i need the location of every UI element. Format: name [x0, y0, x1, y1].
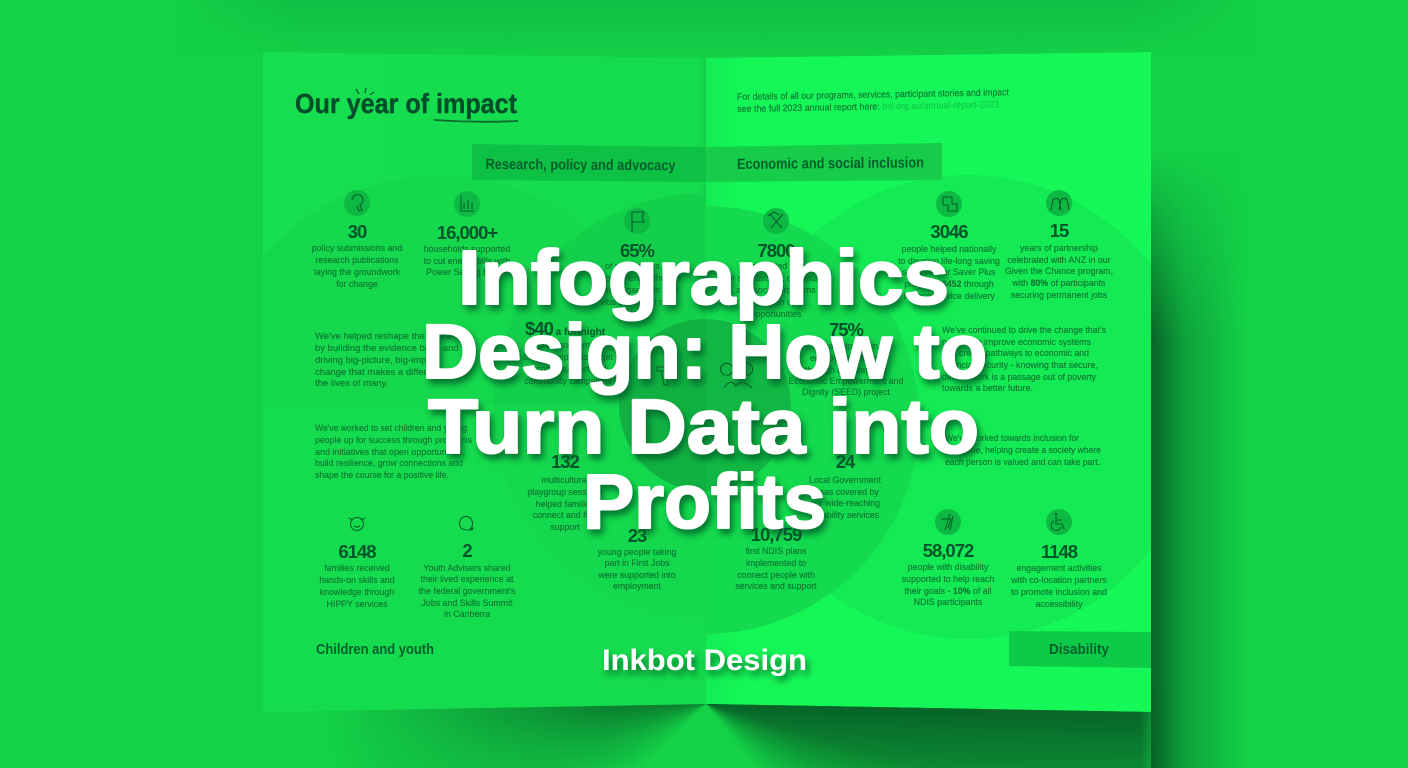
stat: 1148: accessibility: [1036, 599, 1083, 609]
text block: children: people up for success through programs: [315, 435, 472, 446]
stat: 15 years: securing permanent jobs: [1011, 290, 1108, 300]
text block: reshape: change that makes a difference in: [315, 367, 457, 378]
stat: $40 a fortnight: [523, 318, 614, 386]
stat: 6148: knowledge through: [320, 587, 394, 597]
stat: 7800: opportunities: [751, 309, 802, 319]
stat: 10,759: implemented to: [746, 558, 806, 568]
stat: 23: employment: [613, 581, 662, 591]
heading: our year of impact: Our year of impact: [295, 88, 517, 119]
stat: 1148: with co-location partners: [1010, 575, 1107, 585]
panel: right page: [706, 52, 1151, 712]
stat: $40 a fortnight: child and family: [538, 340, 599, 350]
stat: 24: areas covered by: [811, 487, 879, 497]
stat: $40 a fortnight: benefit helped to target: [523, 352, 614, 362]
stat: 30 submissions: policy submissions and: [312, 243, 402, 253]
stat: 15 years: Given the Chance program,: [1005, 266, 1113, 276]
stat: 30 submissions: [312, 190, 402, 289]
stat: 65%: employment pathways: [593, 273, 681, 283]
band: disability: [1009, 631, 1151, 668]
text block: inclusion: We've worked towards inclusion for: [945, 433, 1079, 444]
stat: 23: young people taking: [598, 547, 676, 557]
stat: 15 years: years of partnership: [1020, 243, 1098, 253]
text block: children: [315, 423, 472, 481]
stat: 24: our wide-reaching: [810, 498, 880, 508]
stat: 3046: skills via our Saver Plus: [903, 267, 996, 277]
stat: $40 a fortnight: community campaigns: [524, 376, 612, 386]
stat: 65%: [593, 208, 681, 318]
stat: $40 a fortnight: $40 a fortnight: [525, 318, 606, 339]
text block: economic systems: We've continued to drive the change that's: [942, 325, 1106, 336]
stat: 2 youth advisers: Jobs and Skills Summit: [422, 598, 513, 608]
stat: 15 years: [1005, 190, 1113, 300]
stat: 7800: connected with: [747, 261, 805, 271]
text block: inclusion: each person is valued and can take part.: [945, 457, 1100, 468]
stat: 132: multicultural: [542, 475, 589, 485]
stat: 2 youth advisers: their lived experience at: [421, 574, 514, 584]
band: research, policy and advocacy: [472, 144, 706, 182]
text block: reshape: the lives of many.: [315, 378, 388, 389]
title: Profits: [583, 459, 826, 545]
stat: 132: support: [550, 522, 580, 532]
text block: economic systems: and create pathways to economic and: [942, 348, 1089, 359]
stat: 132: helped families: [536, 499, 595, 509]
heading: disability: Disability: [1049, 641, 1110, 658]
brand: Inkbot Design: Inkbot Design: [602, 644, 807, 677]
stat: 3046: 3046: [930, 221, 968, 242]
stat: 16,000+ households: [424, 191, 510, 277]
stat: 24: disability services: [811, 510, 880, 520]
text block: economic systems: [942, 325, 1106, 394]
stat: 24: Local Government: [809, 475, 881, 485]
stat: 1148: to promote inclusion and: [1011, 587, 1107, 597]
stat: 3046: finance service delivery: [903, 291, 995, 301]
heading: economic and social inclusion: Economic and social inclusion: [737, 154, 924, 173]
stat: 2 youth advisers: [419, 516, 516, 619]
text block: report link: For details of all our programs, services, participant stories and impact: [737, 87, 1009, 103]
stat: 58,072: NDIS participants: [914, 597, 983, 607]
text block: children: We've worked to set children and young: [315, 423, 467, 434]
stat: 2 youth advisers: Youth Advisers shared: [423, 563, 511, 573]
stat: 132: playgroup sessions: [527, 487, 603, 497]
stat: 15 years: with 80% of participants: [1012, 278, 1106, 288]
title: Turn Data into: [428, 384, 979, 470]
icon: megaphone: [657, 363, 675, 385]
stat: 30 submissions: research publications: [315, 255, 399, 265]
stat: 65%: Hope: [626, 308, 648, 318]
stat: 6148: [319, 518, 395, 609]
text block: reshape: driving big-picture, big-impact: [315, 355, 439, 366]
stat: 1148: 1148: [1041, 541, 1078, 562]
heading: research, policy and advocacy: Research, policy and advocacy: [485, 156, 676, 174]
stat: 30 submissions: for change: [336, 279, 378, 289]
stat: 6148: hands-on skills and: [319, 575, 395, 585]
stat: 58,072: [902, 509, 994, 607]
stat: 3046: [898, 191, 1000, 301]
panel: left page: [263, 52, 706, 712]
stat: 7800: our scholarship, community: [722, 273, 830, 283]
stat: 16,000+ households: Power Saving Bonus: [426, 267, 508, 277]
text block: report link: see the full 2023 annual report here: bsl.org.au/annual-report-2023: [737, 99, 999, 115]
stat: 75%: Dignity (SEED) project: [802, 387, 891, 397]
text block: economic systems: towards a better future.: [942, 383, 1033, 394]
stat: 3046: to develop life-long saving: [898, 256, 1000, 266]
stat: 7800: 7800: [757, 240, 795, 261]
text block: inclusion: everyone, helping create a society where: [945, 445, 1101, 456]
title: [422, 235, 987, 545]
stat: 75%: through our Stepping: [805, 365, 887, 375]
stat: 65%: of participants in: [605, 261, 669, 271]
stat: 65%: 65%: [620, 240, 655, 261]
stat: 58,072: their goals - 10% of all: [904, 586, 992, 596]
text block: reshape: by building the evidence base and: [315, 343, 459, 354]
text block: report link: [737, 87, 1010, 115]
stat: 7800: to open up: [755, 297, 797, 307]
stat: 30 submissions: 30: [348, 221, 367, 242]
stat: 132: connect and find: [533, 510, 597, 520]
stat: 10,759: first NDIS plans: [745, 546, 807, 556]
stat: 132: [527, 451, 603, 532]
stat: 3046: program, $452 through: [904, 279, 994, 289]
stat: 1148: engagement activities: [1016, 563, 1102, 573]
stat: 2 youth advisers: the federal government's: [419, 586, 516, 596]
text block: economic systems: decent work is a passage out of poverty: [942, 372, 1096, 383]
stat: 58,072: supported to help reach: [902, 574, 994, 584]
stat: 15 years: 15: [1050, 220, 1069, 241]
text block: children: shape the course for a positive life.: [315, 470, 449, 481]
title: Infographics: [458, 235, 949, 321]
text block: reshape: [315, 331, 459, 389]
text block: economic systems: financial security - knowing that secure,: [942, 360, 1098, 371]
stat: 7800: and social programs: [736, 285, 816, 295]
text block: children: build resilience, grow connections and: [315, 458, 463, 469]
stat: 16,000+ households: 16,000+: [437, 222, 498, 243]
stat: 16,000+ households: to cut energy bills with: [424, 256, 510, 266]
brochure: [263, 52, 1151, 712]
stat: 16,000+ households: households supported: [424, 244, 510, 254]
icon: people: [721, 363, 753, 388]
stat: 1148: [1010, 509, 1107, 609]
stat: 30 submissions: laying the groundwork: [314, 267, 401, 277]
stat: 58,072: 58,072: [923, 540, 974, 561]
stat: 132: 132: [551, 451, 580, 472]
stat: 10,759: connect people with: [737, 570, 815, 580]
stat: 65%: vital steps and met: [600, 297, 674, 307]
stat: 24: [809, 451, 881, 520]
stat: 6148: families received: [324, 563, 390, 573]
document shadow: [228, 0, 1238, 768]
stat: 23: were supported into: [597, 570, 676, 580]
stat: 75%: 75%: [829, 319, 864, 340]
stat: 75%: of participants in: [814, 341, 878, 351]
stat: 75%: Economic Empowerment and: [789, 376, 904, 386]
stat: 65%: were engaged in next: [594, 285, 680, 295]
stat: 23: 23: [628, 525, 647, 546]
stat: 24: 24: [836, 451, 856, 472]
stat: 6148: 6148: [338, 541, 376, 562]
stat: 2 youth advisers: 2: [462, 540, 472, 561]
stat: 75%: employment found: [810, 353, 882, 363]
heading: children and youth: Children and youth: [316, 641, 434, 658]
text block: children: and initiatives that open opportunities,: [315, 447, 465, 458]
stat: 3046: people helped nationally: [902, 244, 997, 254]
stat: 2 youth advisers: in Canberra: [444, 609, 490, 619]
band: economic and social inclusion: [706, 143, 942, 182]
text block: economic systems: needed to improve economic systems: [942, 337, 1091, 348]
stat: 10,759: [735, 524, 817, 591]
text block: inclusion: [945, 433, 1101, 468]
stat: 23: [597, 525, 676, 591]
stat: 58,072: people with disability: [908, 562, 989, 572]
stat: $40 a fortnight: income support and: [529, 364, 607, 374]
stat: 10,759: services and support: [735, 581, 817, 591]
stat: 15 years: celebrated with ANZ in our: [1007, 255, 1111, 265]
stat: 23: part in First Jobs: [604, 558, 670, 568]
stat: 6148: HIPPY services: [327, 599, 388, 609]
text block: reshape: We've helped reshape the future: [315, 331, 452, 342]
stat: 7800: [722, 208, 830, 319]
stat: 75%: [789, 319, 904, 397]
title: Design: How to: [422, 309, 987, 395]
stat: 10,759: 10,759: [751, 524, 802, 545]
